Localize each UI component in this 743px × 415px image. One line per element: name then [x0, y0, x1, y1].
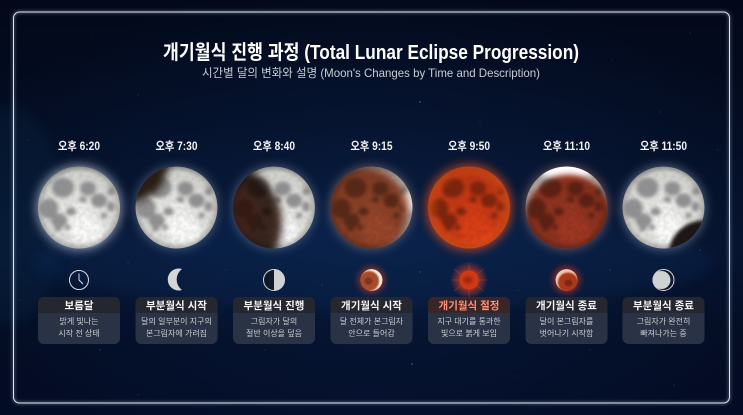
stage 4: totality begins	[318, 139, 420, 344]
moon	[524, 160, 612, 262]
moon	[36, 164, 122, 250]
icon: gibbous moon	[652, 270, 674, 290]
moon	[318, 166, 420, 256]
moon	[227, 160, 320, 254]
card: 달이 본그림자를	[540, 316, 593, 326]
card: 달 전체가 본그림자	[340, 316, 404, 326]
time label: 오후 9:15	[350, 139, 393, 153]
stage 3: partial progress	[227, 140, 320, 344]
icon: clock	[70, 270, 88, 290]
card	[622, 297, 704, 344]
card: 개기월식 시작	[341, 299, 402, 312]
stage 5: totality peak	[426, 139, 512, 344]
card: 안으로 들어감	[348, 328, 395, 338]
card: 보름달	[65, 300, 94, 312]
card: 부분월식 진행	[244, 299, 304, 312]
stage 1: full moon	[36, 139, 122, 344]
card: 부분월식 종료	[633, 299, 694, 312]
card	[233, 297, 315, 344]
card: 그림자가 완전히	[637, 316, 690, 326]
card	[136, 297, 218, 344]
time label: 오후 7:30	[156, 139, 198, 153]
card	[428, 297, 510, 344]
card	[526, 297, 608, 344]
moon	[130, 160, 224, 254]
card: 빛으로 붉게 보임	[441, 328, 497, 338]
icon: small red moon	[358, 266, 386, 294]
card: 지구 대기를 통과한	[437, 317, 501, 326]
card: 본그림자에 가려짐	[146, 328, 207, 338]
moon	[616, 160, 711, 255]
time label: 오후 9:50	[448, 139, 490, 153]
card: 달의 일부분이 지구의	[141, 316, 212, 326]
card: 그림자가 달의	[251, 316, 297, 326]
time label: 오후 11:50	[640, 139, 687, 153]
icon: small red moon	[552, 266, 580, 294]
stage 7: partial ends	[616, 140, 711, 344]
stage 2: partial begins	[130, 140, 224, 344]
icon: glowing red moon	[450, 261, 488, 299]
time label: 오후 8:40	[253, 139, 295, 153]
card: 부분월식 시작	[146, 299, 207, 312]
time label: 오후 6:20	[58, 139, 100, 153]
card: 절반 이상을 덮음	[246, 328, 302, 338]
card: 밝게 빛나는	[59, 316, 99, 326]
card: 벗어나기 시작함	[540, 328, 594, 338]
card	[38, 297, 120, 344]
stage 6: totality ends	[524, 139, 612, 344]
card	[330, 297, 412, 344]
moon	[426, 164, 512, 250]
icon: half moon	[264, 270, 284, 290]
card: 개기월식 종료	[536, 299, 597, 312]
subtitle: 시간별 달의 변화와 설명 (Moon's Changes by Time and Description)	[202, 66, 540, 80]
time label: 오후 11:10	[543, 139, 590, 153]
title: 개기월식 진행 과정 (Total Lunar Eclipse Progression)	[163, 41, 579, 64]
card: 시작 전 상태	[58, 328, 100, 338]
card: 개기월식 절정	[439, 299, 499, 312]
icon: crescent	[168, 268, 182, 290]
card: 빠져나가는 중	[640, 328, 687, 338]
